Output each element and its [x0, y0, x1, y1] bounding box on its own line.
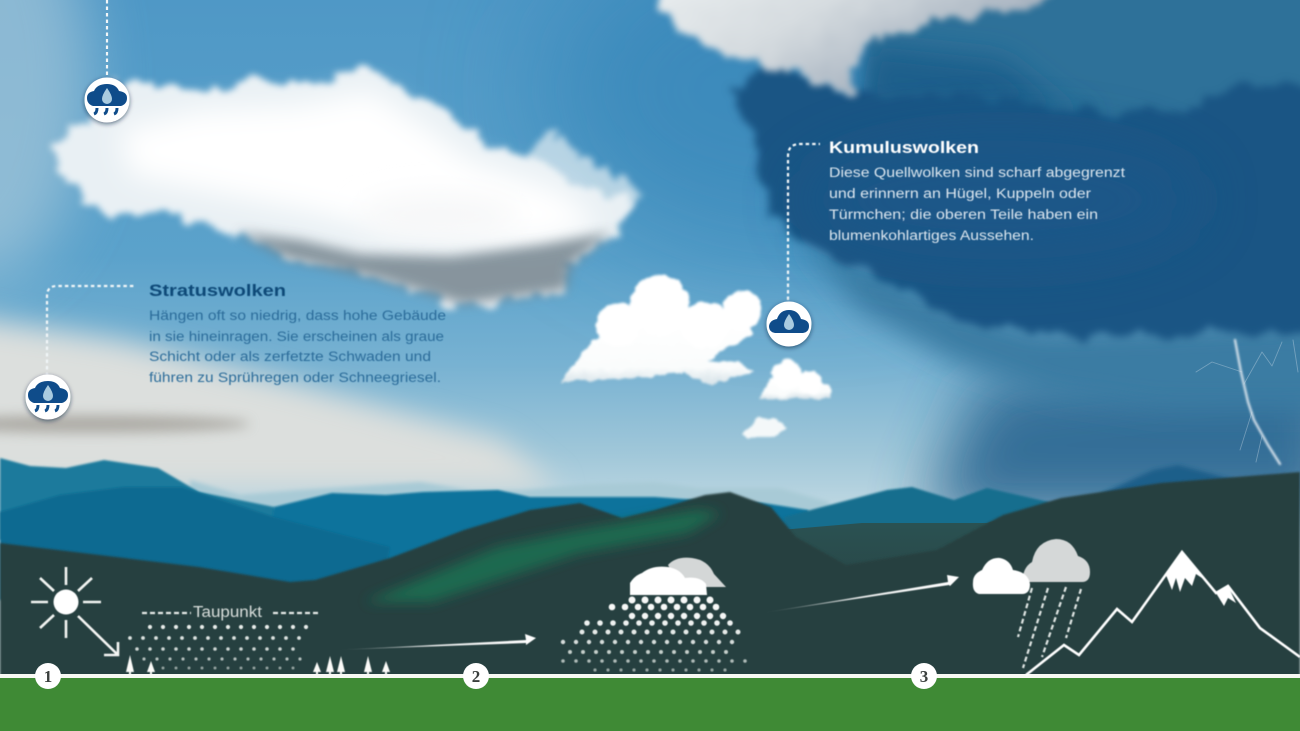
arrow: sun to ground [78, 616, 118, 655]
icon pin: cloud for cumulus [766, 302, 812, 346]
small cumulus cloud C [741, 418, 787, 438]
icon: rain clouds [973, 539, 1090, 668]
leader line [788, 144, 820, 300]
body text: blumenkohlartiges Aussehen. [829, 228, 1034, 243]
icon: forming cloud, grey behind white [630, 558, 726, 595]
ground: green band and white line [0, 674, 1300, 731]
label: Taupunkt dew point: Taupunkt [193, 604, 263, 621]
heading: Kumuluswolken [829, 138, 979, 157]
storm cloud mass [727, 0, 1300, 520]
lightning [1196, 340, 1298, 464]
body text [149, 308, 446, 385]
number badge 1: 1 [44, 667, 52, 686]
leader line [47, 286, 134, 376]
number badge 3 [911, 663, 937, 689]
dots: rising moist air [130, 627, 318, 668]
icon pin: rain cloud for stratus [26, 374, 70, 420]
small cumulus cloud B [760, 360, 830, 399]
icons: trees [126, 655, 390, 675]
number badge 2 [463, 663, 489, 689]
body text: führen zu Sprühregen oder Schneegriesel. [149, 370, 441, 385]
arrow: step 2 to 3 [762, 575, 959, 613]
number badge 3: 3 [920, 667, 928, 686]
body text [829, 165, 1125, 243]
number badge 2: 2 [472, 667, 480, 686]
body text: und erinnern an Hügel, Kuppeln oder [829, 186, 1092, 201]
number badge 1 [35, 663, 61, 689]
body text: Diese Quellwolken sind scharf abgegrenzt [829, 165, 1125, 180]
body text: Hängen oft so niedrig, dass hohe Gebäude [149, 308, 446, 323]
large white cloud [55, 67, 644, 305]
heading: Stratuswolken [149, 281, 286, 300]
icon: sun with rays [31, 567, 101, 638]
cumulus cloud top right, grey-white [655, 0, 1080, 95]
body text: Türmchen; die oberen Teile haben ein [829, 207, 1098, 222]
body text: Schicht oder als zerfetzte Schwaden und [149, 349, 431, 364]
icon pin: rain cloud top left [84, 78, 130, 122]
callout: Stratuswolken [47, 281, 446, 385]
arrow: step 1 to 2 [336, 634, 536, 650]
leader line: top left pin [106, 0, 108, 78]
small cumulus cloud A [560, 275, 762, 384]
body text: in sie hineinragen. Sie erscheinen als graue [149, 329, 444, 344]
dots: condensing air beneath cloud [563, 600, 756, 670]
mountain layers [0, 458, 1300, 680]
icon: mountain outline with snow cap [1026, 552, 1300, 675]
callout: Kumuluswolken [788, 138, 1125, 300]
